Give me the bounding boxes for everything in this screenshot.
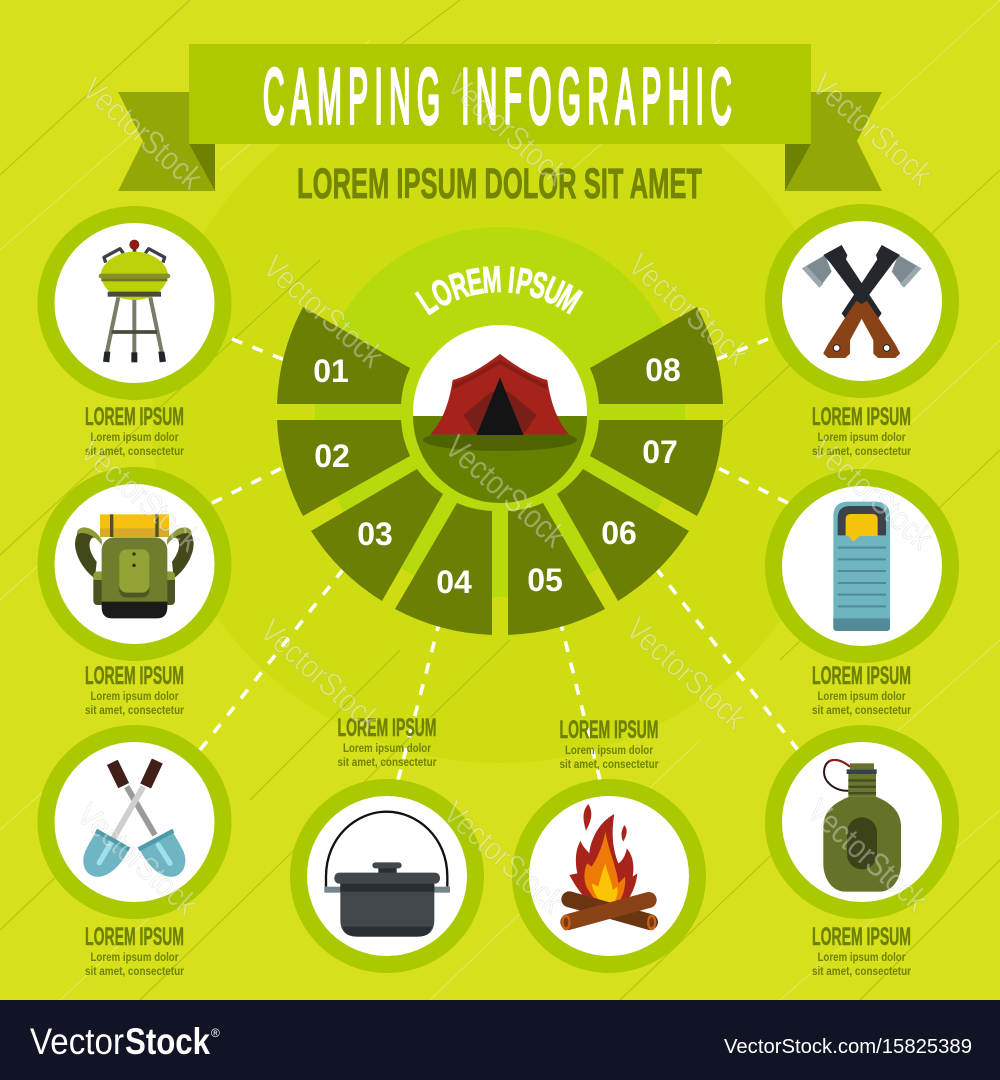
label: axes: Lorem ipsum dolor <box>818 432 906 444</box>
icon: backpack <box>75 514 194 618</box>
faint centre circle <box>315 227 685 597</box>
label: sleeping bag: Lorem ipsum dolor <box>818 691 906 703</box>
icon: shovels <box>83 761 185 877</box>
segment 02 <box>277 420 410 516</box>
centre tent disc <box>413 325 587 503</box>
segment 06 <box>557 469 689 601</box>
watermarks: VectorStock <box>256 248 391 375</box>
segment 01 <box>277 307 410 404</box>
subtitle: LOREM IPSUM DOLOR SIT AMET <box>297 160 702 208</box>
label: axes: sit amet, consectetur <box>812 446 911 458</box>
label: shovels <box>85 923 184 978</box>
label: canteen: sit amet, consectetur <box>812 966 911 978</box>
segment 02: 02 <box>314 438 350 474</box>
label: canteen: Lorem ipsum dolor <box>818 952 906 964</box>
segment 01: 01 <box>313 353 349 389</box>
panel: axes <box>765 204 959 398</box>
label: backpack: Lorem ipsum dolor <box>90 691 179 703</box>
segment 04 <box>395 503 492 635</box>
arc heading: M <box>550 276 588 322</box>
arc heading: O <box>425 270 459 316</box>
arc heading: U <box>538 268 570 313</box>
title: CAMPING INFOGRAPHIC <box>263 53 738 140</box>
watermarks: VectorStock <box>440 66 575 193</box>
panel: pot <box>290 779 484 973</box>
footer bar <box>0 1000 1000 1080</box>
arc heading: M <box>481 258 503 301</box>
icon: axes <box>802 245 921 357</box>
watermarks: VectorStock <box>438 428 573 555</box>
wheel segments with numbers <box>277 307 723 635</box>
arc heading: S <box>525 263 552 308</box>
watermarks: VectorStock <box>800 792 935 919</box>
segment 06: 06 <box>601 515 637 551</box>
watermarks: VectorStock <box>73 432 208 559</box>
label: grill: LOREM IPSUM <box>85 403 184 431</box>
arc heading: E <box>463 260 486 304</box>
panel: grill <box>38 206 232 400</box>
watermarks: VectorStock <box>70 796 205 923</box>
segment 08: 08 <box>645 352 681 388</box>
footer url: VectorStock.com/15825389 <box>724 1036 972 1058</box>
label: campfire: Lorem ipsum dolor <box>565 745 653 757</box>
arc heading <box>409 258 588 323</box>
label: axes <box>812 403 911 458</box>
panel: sleeping bag <box>765 469 959 663</box>
segment 08 <box>590 307 723 404</box>
label: backpack: LOREM IPSUM <box>85 662 184 690</box>
arc heading: I <box>507 259 517 301</box>
label: grill: Lorem ipsum dolor <box>90 432 179 444</box>
title ribbon <box>118 44 882 191</box>
panel: shovels <box>38 725 232 919</box>
segment 07: 07 <box>642 434 678 470</box>
label: shovels: sit amet, consectetur <box>85 966 184 978</box>
icon: grill <box>99 240 170 362</box>
footer logo: Stock <box>125 1021 210 1062</box>
arc heading: P <box>513 260 536 304</box>
dashed connectors <box>200 339 798 780</box>
panel: canteen <box>765 725 959 919</box>
segment 05 <box>508 503 605 635</box>
segment 05: 05 <box>527 562 563 598</box>
panel: backpack <box>38 467 232 661</box>
label: shovels: Lorem ipsum dolor <box>90 952 179 964</box>
watermarks: VectorStock <box>805 430 940 557</box>
footer logo <box>30 1021 220 1062</box>
label: campfire <box>560 716 659 771</box>
segment 07 <box>590 420 723 516</box>
arc heading: R <box>445 263 473 308</box>
icon: canteen <box>823 760 901 892</box>
label: backpack <box>85 662 184 717</box>
segment 03 <box>311 469 443 601</box>
label: pot: Lorem ipsum dolor <box>343 743 431 755</box>
icon: campfire <box>561 804 656 930</box>
segment 04: 04 <box>436 564 472 600</box>
watermarks: VectorStock <box>619 610 754 737</box>
footer logo: ® <box>211 1026 220 1040</box>
watermarks: VectorStock <box>75 70 210 197</box>
label: axes: LOREM IPSUM <box>812 403 911 431</box>
label: pot: LOREM IPSUM <box>338 714 436 742</box>
label: shovels: LOREM IPSUM <box>85 923 184 951</box>
label: grill <box>85 403 184 458</box>
label: pot: sit amet, consectetur <box>338 757 437 769</box>
watermarks: VectorStock <box>436 794 571 921</box>
label: sleeping bag: sit amet, consectetur <box>812 705 911 717</box>
watermarks: VectorStock <box>253 612 388 739</box>
panel: campfire <box>512 779 706 973</box>
label: canteen: LOREM IPSUM <box>812 923 911 951</box>
watermarks <box>70 66 940 923</box>
segment 03: 03 <box>357 516 393 552</box>
watermarks: VectorStock <box>621 246 756 373</box>
watermarks: VectorStock <box>805 66 940 193</box>
arc heading: L <box>409 280 444 323</box>
label: sleeping bag: LOREM IPSUM <box>812 662 911 690</box>
icon: sleeping bag <box>833 502 890 631</box>
label: backpack: sit amet, consectetur <box>85 705 184 717</box>
icon: pot <box>324 812 450 937</box>
footer logo: Vector <box>30 1021 124 1062</box>
label: sleeping bag <box>812 662 911 717</box>
label: campfire: LOREM IPSUM <box>560 716 658 744</box>
label: pot <box>338 714 437 769</box>
label: campfire: sit amet, consectetur <box>560 759 659 771</box>
label: canteen <box>812 923 911 978</box>
label: grill: sit amet, consectetur <box>85 446 184 458</box>
